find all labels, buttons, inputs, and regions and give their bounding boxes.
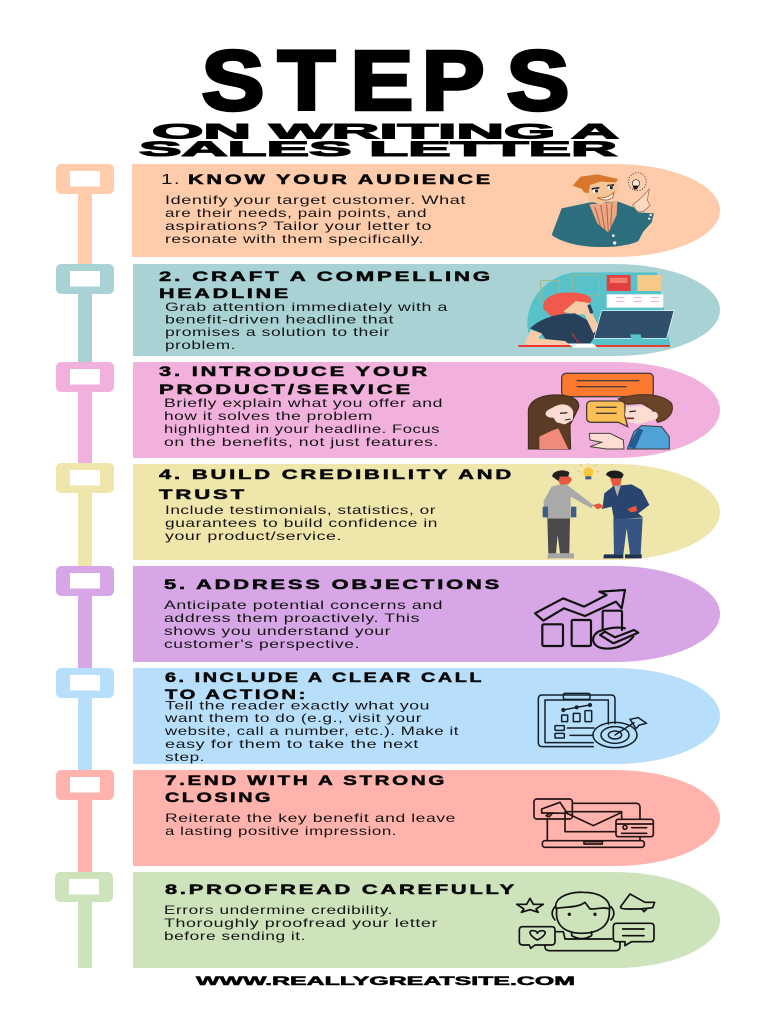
timeline marker 8: [55, 872, 113, 968]
step 1 body text: aspirations? Tailor your letter to: [165, 219, 432, 233]
step 4 heading: [159, 466, 514, 502]
step 6 heading: 6. INCLUDE A CLEAR CALL: [165, 669, 484, 685]
step 7 heading: 7.END WITH A STRONG: [165, 772, 447, 788]
timeline marker 3: [56, 362, 114, 463]
step 6 heading: [165, 669, 484, 702]
step 2 body text: promises a solution to their: [165, 325, 390, 339]
step 1 heading: 1.: [161, 172, 181, 188]
step 1 heading: [161, 171, 493, 188]
timeline marker 5: [56, 566, 114, 668]
timeline marker 4: [56, 463, 114, 566]
panel: step 3 product/service: [133, 362, 720, 458]
step 4 heading: TRUST: [159, 486, 247, 502]
step 6 heading: TO ACTION:: [165, 686, 308, 702]
panel: step 5 objections: [133, 566, 720, 662]
step 2 heading: 2. CRAFT A COMPELLING: [159, 268, 493, 284]
step 3 body text: Briefly explain what you offer and: [164, 396, 443, 410]
step 5 body text: customer's perspective.: [164, 637, 360, 651]
step 6 body text: [164, 698, 459, 764]
icon: business handshake: [543, 463, 649, 558]
panel: step 6 call to action: [133, 668, 720, 764]
step 8 body text: Errors undermine credibility.: [164, 903, 393, 917]
step 7 body text: Reiterate the key benefit and leave: [165, 811, 456, 825]
panel: step 7 closing: [133, 770, 720, 866]
step 2 body text: [165, 300, 448, 352]
step 5 body text: shows you understand your: [164, 624, 391, 638]
step 3 heading: PRODUCT/SERVICE: [159, 381, 413, 397]
step 3 heading: [159, 363, 430, 397]
step 6 body text: want them to do (e.g., visit your: [164, 711, 422, 725]
step 5 body text: Anticipate potential concerns and: [164, 598, 443, 612]
subtitle: [139, 120, 619, 161]
step 4 body text: [165, 503, 438, 543]
panel: step 1 know your audience: [132, 164, 720, 257]
step 1 body text: Identify your target customer. What: [165, 193, 466, 207]
step 5 body text: address them proactively. This: [164, 611, 420, 625]
icon: two people talking: [528, 373, 672, 449]
step 6 body text: website, call a number, etc.). Make it: [164, 724, 459, 738]
step 2 body text: problem.: [165, 338, 236, 352]
step 7 heading: CLOSING: [165, 789, 273, 805]
step 6 body text: easy for them to take the next: [165, 737, 419, 751]
timeline marker 7: [56, 770, 114, 872]
panel: step 8 proofread: [133, 872, 720, 968]
step 5 heading: 5. ADDRESS OBJECTIONS: [164, 576, 502, 592]
title: STEPS: STEPS: [202, 33, 569, 127]
step 5 body text: [164, 598, 443, 651]
step 2 body text: benefit-driven headline that: [165, 312, 394, 326]
icon: person with social bubbles: [517, 892, 655, 951]
icon: growth chart with check: [535, 590, 638, 649]
icon: clipboard with target: [538, 693, 647, 748]
icon: man with idea: [552, 173, 654, 247]
step 8 body text: before sending it.: [164, 929, 306, 943]
step 3 body text: highlighted in your headline. Focus: [164, 422, 440, 436]
step 3 body text: how it solves the problem: [164, 409, 373, 423]
panel: step 4 credibility: [133, 463, 720, 560]
step 4 heading: 4. BUILD CREDIBILITY AND: [159, 466, 514, 482]
step 7 body text: a lasting positive impression.: [165, 824, 397, 838]
subtitle: ON WRITING A: [152, 120, 619, 144]
timeline marker 2: [56, 264, 114, 362]
step 2 body text: Grab attention immediately with a: [165, 300, 448, 314]
timeline marker 6: [56, 668, 114, 770]
icon: laptop with envelope and megaphone: [534, 799, 653, 847]
step 3 heading: 3. INTRODUCE YOUR: [159, 363, 430, 379]
step 2 heading: [159, 268, 493, 301]
step 7 heading: [165, 772, 447, 805]
step 6 body text: step.: [165, 750, 205, 764]
step 6 body text: Tell the reader exactly what you: [165, 698, 430, 712]
step 1 heading: KNOW YOUR AUDIENCE: [188, 171, 493, 187]
step 7 body text: [165, 811, 456, 838]
panel: step 2 headline: [133, 264, 720, 356]
step 8 body text: Thoroughly proofread your letter: [164, 916, 438, 930]
timeline marker 1: [56, 164, 114, 264]
step 1 body text: resonate with them specifically.: [165, 232, 424, 246]
footer website: WWW.REALLYGREATSITE.COM: [196, 976, 575, 988]
step 2 heading: HEADLINE: [159, 285, 291, 301]
step 3 body text: [164, 396, 443, 449]
step 8 heading: 8.PROOFREAD CAREFULLY: [165, 881, 517, 897]
step 1 body text: [165, 193, 466, 246]
step 4 body text: guarantees to build confidence in: [165, 516, 438, 530]
step 4 body text: Include testimonials, statistics, or: [165, 503, 436, 517]
subtitle: SALES LETTER: [139, 138, 617, 161]
icon: woman on phone at computer: [518, 272, 674, 348]
step 4 body text: your product/service.: [165, 529, 342, 543]
step 8 body text: [164, 903, 438, 943]
step 3 body text: on the benefits, not just features.: [164, 435, 439, 449]
step 1 body text: are their needs, pain points, and: [165, 206, 427, 220]
